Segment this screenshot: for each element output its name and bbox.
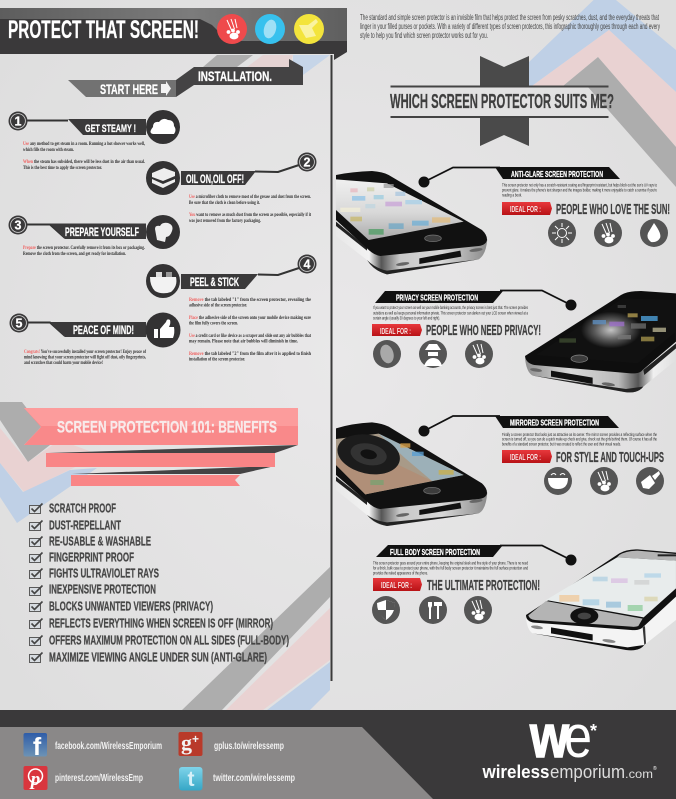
- icon: pinterest: [24, 766, 48, 790]
- ideal for tag: IDEAL FOR :: [380, 326, 411, 336]
- icon: brush: [636, 467, 664, 495]
- step 4: PEEL & STICK: [190, 275, 239, 289]
- phone: mirrored: [334, 422, 487, 526]
- installation banner: [176, 59, 303, 97]
- icon: scratch: [464, 596, 492, 624]
- ideal for text: PEOPLE WHO NEED PRIVACY!: [426, 323, 541, 339]
- callout title: MIRRORED SCREEN PROTECTION: [510, 418, 599, 428]
- vertical divider: [330, 55, 332, 681]
- icon: google plus: +: [192, 732, 199, 746]
- icon: shield: [372, 596, 400, 624]
- background chevrons: left: [0, 402, 100, 523]
- step text: [189, 297, 312, 362]
- ideal for text: THE ULTIMATE PROTECTION!: [427, 578, 540, 594]
- step text: Prepare the screen protector. Carefully remove it from its box or packaging.: [23, 245, 145, 251]
- step 3: [8, 215, 180, 257]
- icon: red scratch circle: [217, 14, 247, 44]
- step text: Place the adhesive side of the screen onto your mobile device making sure: [189, 315, 311, 321]
- step 4: [146, 254, 316, 362]
- benefits checklist: [30, 502, 289, 664]
- icon: yellow brush circle: [294, 14, 324, 44]
- benefits checklist: REFLECTS EVERYTHING WHEN SCREEN IS OFF (MIRROR): [49, 616, 273, 630]
- google plus link: gplus.to/wirelessemp: [214, 741, 284, 752]
- intro text: style to help you find which screen protector works out for you.: [360, 31, 488, 40]
- icon: peel tab: [146, 264, 180, 298]
- header band: [0, 8, 347, 60]
- intro text: [360, 13, 660, 40]
- step text: and scratches that could harm your mobile device!: [24, 360, 103, 366]
- step text: This is the best time to apply the screen protector.: [23, 165, 102, 171]
- benefits checklist: FINGERPRINT PROOF: [49, 550, 134, 564]
- icon: scratch: [465, 340, 493, 368]
- step text: You want to remove as much dust from the screen as possible, especially if it: [189, 212, 311, 218]
- icon: cloud: [146, 110, 180, 144]
- footer: [0, 703, 676, 799]
- benefits checklist: SCRATCH PROOF: [49, 502, 116, 516]
- benefits checklist: DUST-REPELLANT: [49, 518, 121, 532]
- icon: google plus: g: [181, 730, 192, 755]
- icon: scratch: [594, 219, 622, 247]
- start here banner: [68, 80, 176, 97]
- number: [8, 112, 28, 130]
- number: [298, 152, 316, 172]
- step text: the film fully covers the screen.: [189, 320, 238, 326]
- phone: privacy: [525, 291, 676, 392]
- callout text: [373, 305, 528, 320]
- number: 2: [304, 156, 311, 170]
- icon: google plus: [178, 730, 202, 756]
- twitter link: twitter.com/wirelessemp: [213, 773, 295, 784]
- icon: blue fingerprint circle: [255, 14, 285, 44]
- arrow: [161, 81, 171, 96]
- ideal for tag: IDEAL FOR :: [381, 580, 412, 590]
- phone: anti-glare: [336, 171, 487, 274]
- facebook link: facebook.com/WirelessEmporium: [55, 741, 162, 752]
- ideal for tag: [373, 578, 422, 591]
- step text: [23, 245, 145, 257]
- logo: ®: [653, 765, 657, 772]
- callout: anti-glare: [418, 167, 670, 247]
- step text: Use a microfiber cloth to remove most of the grease and dust from the screen.: [189, 194, 311, 200]
- step 1: GET STEAMY !: [85, 123, 136, 135]
- callout title: FULL BODY SCREEN PROTECTION: [390, 547, 480, 557]
- step 5: [10, 312, 180, 366]
- step text: was just removed from the factory packaging.: [189, 218, 261, 224]
- callout title: ANTI-GLARE SCREEN PROTECTION: [511, 169, 603, 179]
- step text: When the steam has subsided, there will be less dust in the air than usual.: [23, 159, 145, 165]
- step text: [23, 141, 145, 171]
- logo: w: [529, 703, 569, 770]
- callout: mirrored: [418, 416, 664, 495]
- callout text: certain angle (usually 30 degrees to your left and right).: [373, 316, 440, 320]
- callout: privacy: [372, 290, 576, 368]
- icon: thumbs up: [146, 312, 180, 348]
- icon: cloths: [146, 161, 180, 195]
- number: [298, 254, 316, 274]
- ribbon heading: SCREEN PROTECTION 101: BENEFITS: [57, 418, 277, 436]
- ideal for tag: [502, 202, 552, 215]
- benefits checklist: MAXIMIZE VIEWING ANGLE UNDER SUN (ANTI-GLARE): [49, 650, 267, 664]
- callout text: [502, 182, 657, 198]
- icon: facebook: [24, 733, 47, 761]
- start here banner: START HERE: [100, 81, 158, 97]
- benefits checklist: RE-USABLE & WASHABLE: [49, 534, 151, 548]
- background chevrons: under header: [203, 55, 330, 75]
- ideal for tag: [502, 450, 552, 463]
- callout text: benefits of a standard screen protector, but it was created to reflect the user and their visual needs.: [502, 442, 621, 446]
- ideal for tag: IDEAL FOR :: [510, 204, 541, 214]
- logo: [482, 703, 657, 782]
- callout text: [502, 432, 657, 446]
- logo: e: [564, 703, 592, 770]
- step text: may remain. Please note that air bubbles will diminish in time.: [189, 338, 298, 344]
- step text: Remove the tab labeled "2" from the film after it is applied to finish: [189, 351, 312, 357]
- background chevrons: top right: [529, 0, 676, 187]
- benefits checklist: FIGHTS ULTRAVIOLET RAYS: [49, 566, 159, 580]
- step text: Remove the tab labeled "1" from the screen protector, revealing the: [189, 297, 311, 303]
- callout text: This screen protector goes around your entire phone, keeping the original sleek and fine style of your phone. There is no need: [373, 560, 528, 566]
- step text: Use any method to get steam in a room. Running a hot shower works well,: [23, 141, 145, 147]
- step 5: PEACE OF MIND!: [73, 323, 134, 337]
- step text: Be sure that the cloth is clean before using it.: [189, 200, 260, 206]
- icon: twitter: [179, 767, 202, 791]
- step text: Use a credit card or like device as a scraper and slide out any air bubbles that: [189, 333, 311, 339]
- ideal for tag: [372, 324, 422, 336]
- benefits ribbon: [24, 408, 298, 486]
- step text: [24, 349, 146, 366]
- icon: facebook: f: [33, 733, 42, 761]
- callout text: If you want to protect your screen as well as your mobile banking accounts, the privacy screen is best just that. The screen provides: [373, 305, 528, 310]
- callout text: [373, 560, 529, 576]
- ideal for tag: IDEAL FOR :: [510, 452, 541, 462]
- step text: Congrats! You've successfully installed your screen protector! Enjoy peace of: [24, 349, 146, 355]
- step 2: OIL ON,OIL OFF!: [186, 174, 244, 186]
- callout text: reading a book.: [502, 192, 522, 198]
- number: 3: [15, 218, 22, 232]
- logo: wireless: [482, 762, 550, 782]
- step text: Remove the cloth from the screen, and get ready for installation.: [23, 251, 126, 257]
- icon: glove: [146, 215, 180, 249]
- icon: tools: [419, 596, 447, 624]
- benefits checklist: BLOCKS UNWANTED VIEWERS (PRIVACY): [49, 600, 213, 614]
- icon: scratch: [590, 467, 618, 495]
- pinterest link: pinterest.com/WirelessEmp: [55, 773, 143, 784]
- icon: fingerprint: [373, 340, 401, 368]
- title: PROTECT THAT SCREEN!: [8, 16, 199, 44]
- number: 4: [304, 258, 311, 272]
- step text: mind knowing that your screen protector will fight off dust, oily fingerprints,: [24, 354, 146, 360]
- icon: drop: [640, 219, 668, 247]
- icon: pinterest: p: [29, 769, 40, 790]
- step text: [189, 194, 311, 224]
- benefits checklist: OFFERS MAXIMUM PROTECTION ON ALL SIDES (FULL-BODY): [49, 634, 289, 648]
- step 3: PREPARE YOURSELF: [65, 225, 139, 239]
- installation banner: INSTALLATION.: [198, 68, 272, 84]
- icon: spy: [419, 340, 447, 368]
- step 1: [8, 110, 180, 171]
- number: 5: [16, 316, 23, 330]
- callout text: provides the naked appearance of the phone.: [373, 570, 428, 576]
- callout text: outsiders as well as keeps personal information private. This screen protector can darken out your LCD screen when viewed at a: [373, 310, 528, 316]
- logo: *: [590, 721, 597, 741]
- logo: .com: [625, 767, 653, 781]
- step 2: [146, 152, 316, 224]
- logo: emporium: [550, 762, 625, 782]
- step text: adhesive side of the screen protector.: [189, 302, 247, 308]
- number: [8, 216, 28, 234]
- number: [10, 314, 28, 332]
- icon: twitter: t: [188, 768, 194, 791]
- phone: full body: [526, 549, 676, 650]
- callout text: for a thick, bulk case to protect your phone, with the full body screen protector it maintains the full surface protection and: [373, 566, 529, 570]
- number: 1: [15, 114, 22, 128]
- benefits checklist: INEXPENSIVE PROTECTION: [49, 582, 156, 596]
- step text: which fills the room with steam.: [23, 147, 74, 153]
- section heading: which screen protector: [390, 56, 614, 146]
- callout: full body: [372, 545, 576, 624]
- step text: installation of the screen protector.: [189, 356, 245, 362]
- icon: sun: [548, 219, 576, 247]
- background chevrons: lower middle: [182, 567, 330, 710]
- callout title: PRIVACY SCREEN PROTECTION: [396, 292, 478, 302]
- icon: makeup bowl: [544, 467, 572, 495]
